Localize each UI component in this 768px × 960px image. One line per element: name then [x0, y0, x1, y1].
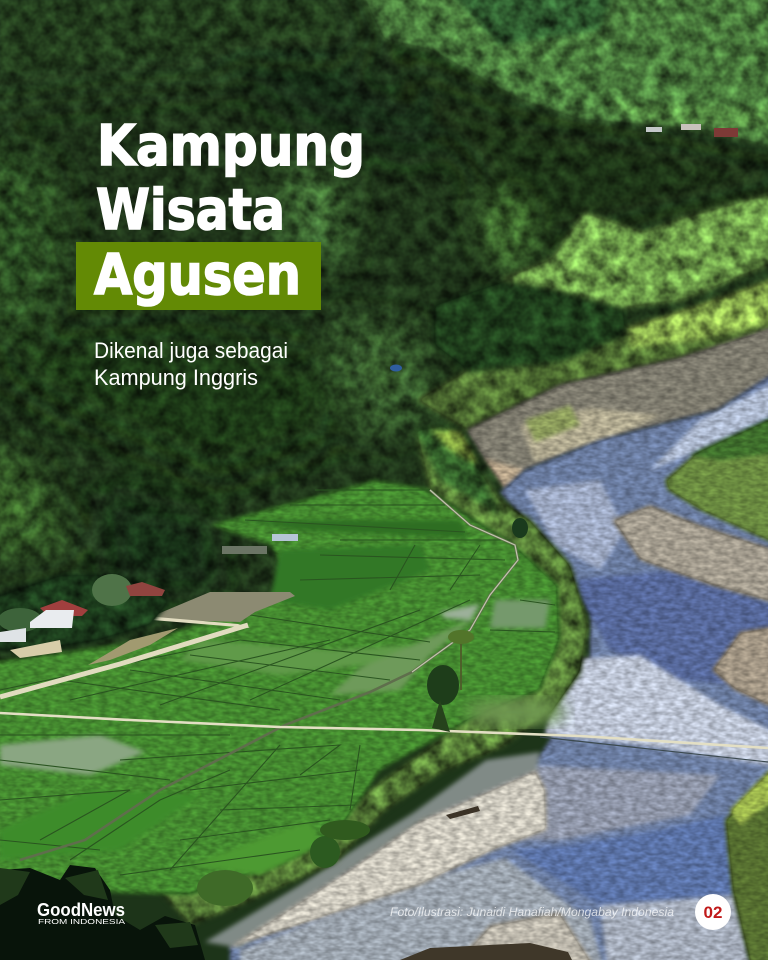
irrigation wall [20, 490, 518, 860]
title line: Wisata: Wisata [96, 178, 285, 243]
cross path and suspension bridge [0, 713, 768, 748]
background photo: forest hillside [0, 0, 768, 660]
rice base field [0, 480, 560, 895]
subtitle [94, 338, 288, 390]
vegetation strip along the rice field [160, 425, 588, 925]
village roofs on distant hill [646, 124, 738, 137]
page number badge: 02 [704, 903, 722, 922]
highlighted title: Agusen: Agusen [94, 243, 301, 308]
gravel bank and green island on the right [612, 405, 768, 960]
subtitle: Dikenal juga sebagai [94, 338, 288, 363]
main white path [0, 625, 248, 697]
subtitle: Kampung Inggris [94, 365, 258, 390]
paddy dikes [0, 490, 555, 875]
palm and riverside trees [197, 364, 565, 906]
river [230, 356, 768, 960]
rice terraces [0, 480, 560, 895]
gravel bar lower [228, 770, 610, 960]
title line: Kampung: Kampung [97, 114, 365, 179]
side channel [205, 752, 540, 948]
logo: GoodNews from Indonesia: GoodNews [37, 900, 125, 920]
gravel river beach upper [467, 318, 768, 490]
village pond and paths [0, 592, 768, 762]
flooded and light paddies [0, 520, 550, 875]
driftwood logs [400, 806, 572, 960]
logo: GoodNews from Indonesia: FROM INDONESIA [38, 917, 125, 926]
photo credit: Foto/Ilustrasi: Junaidi Hanafiah/Mongabay Indonesia [390, 905, 674, 919]
title heading [96, 114, 365, 243]
dark foliage bottom left [0, 865, 205, 960]
distant hill top right [350, 0, 768, 154]
green slope field on the right [417, 185, 768, 430]
village trees and houses [0, 534, 298, 658]
page number badge [695, 894, 731, 930]
